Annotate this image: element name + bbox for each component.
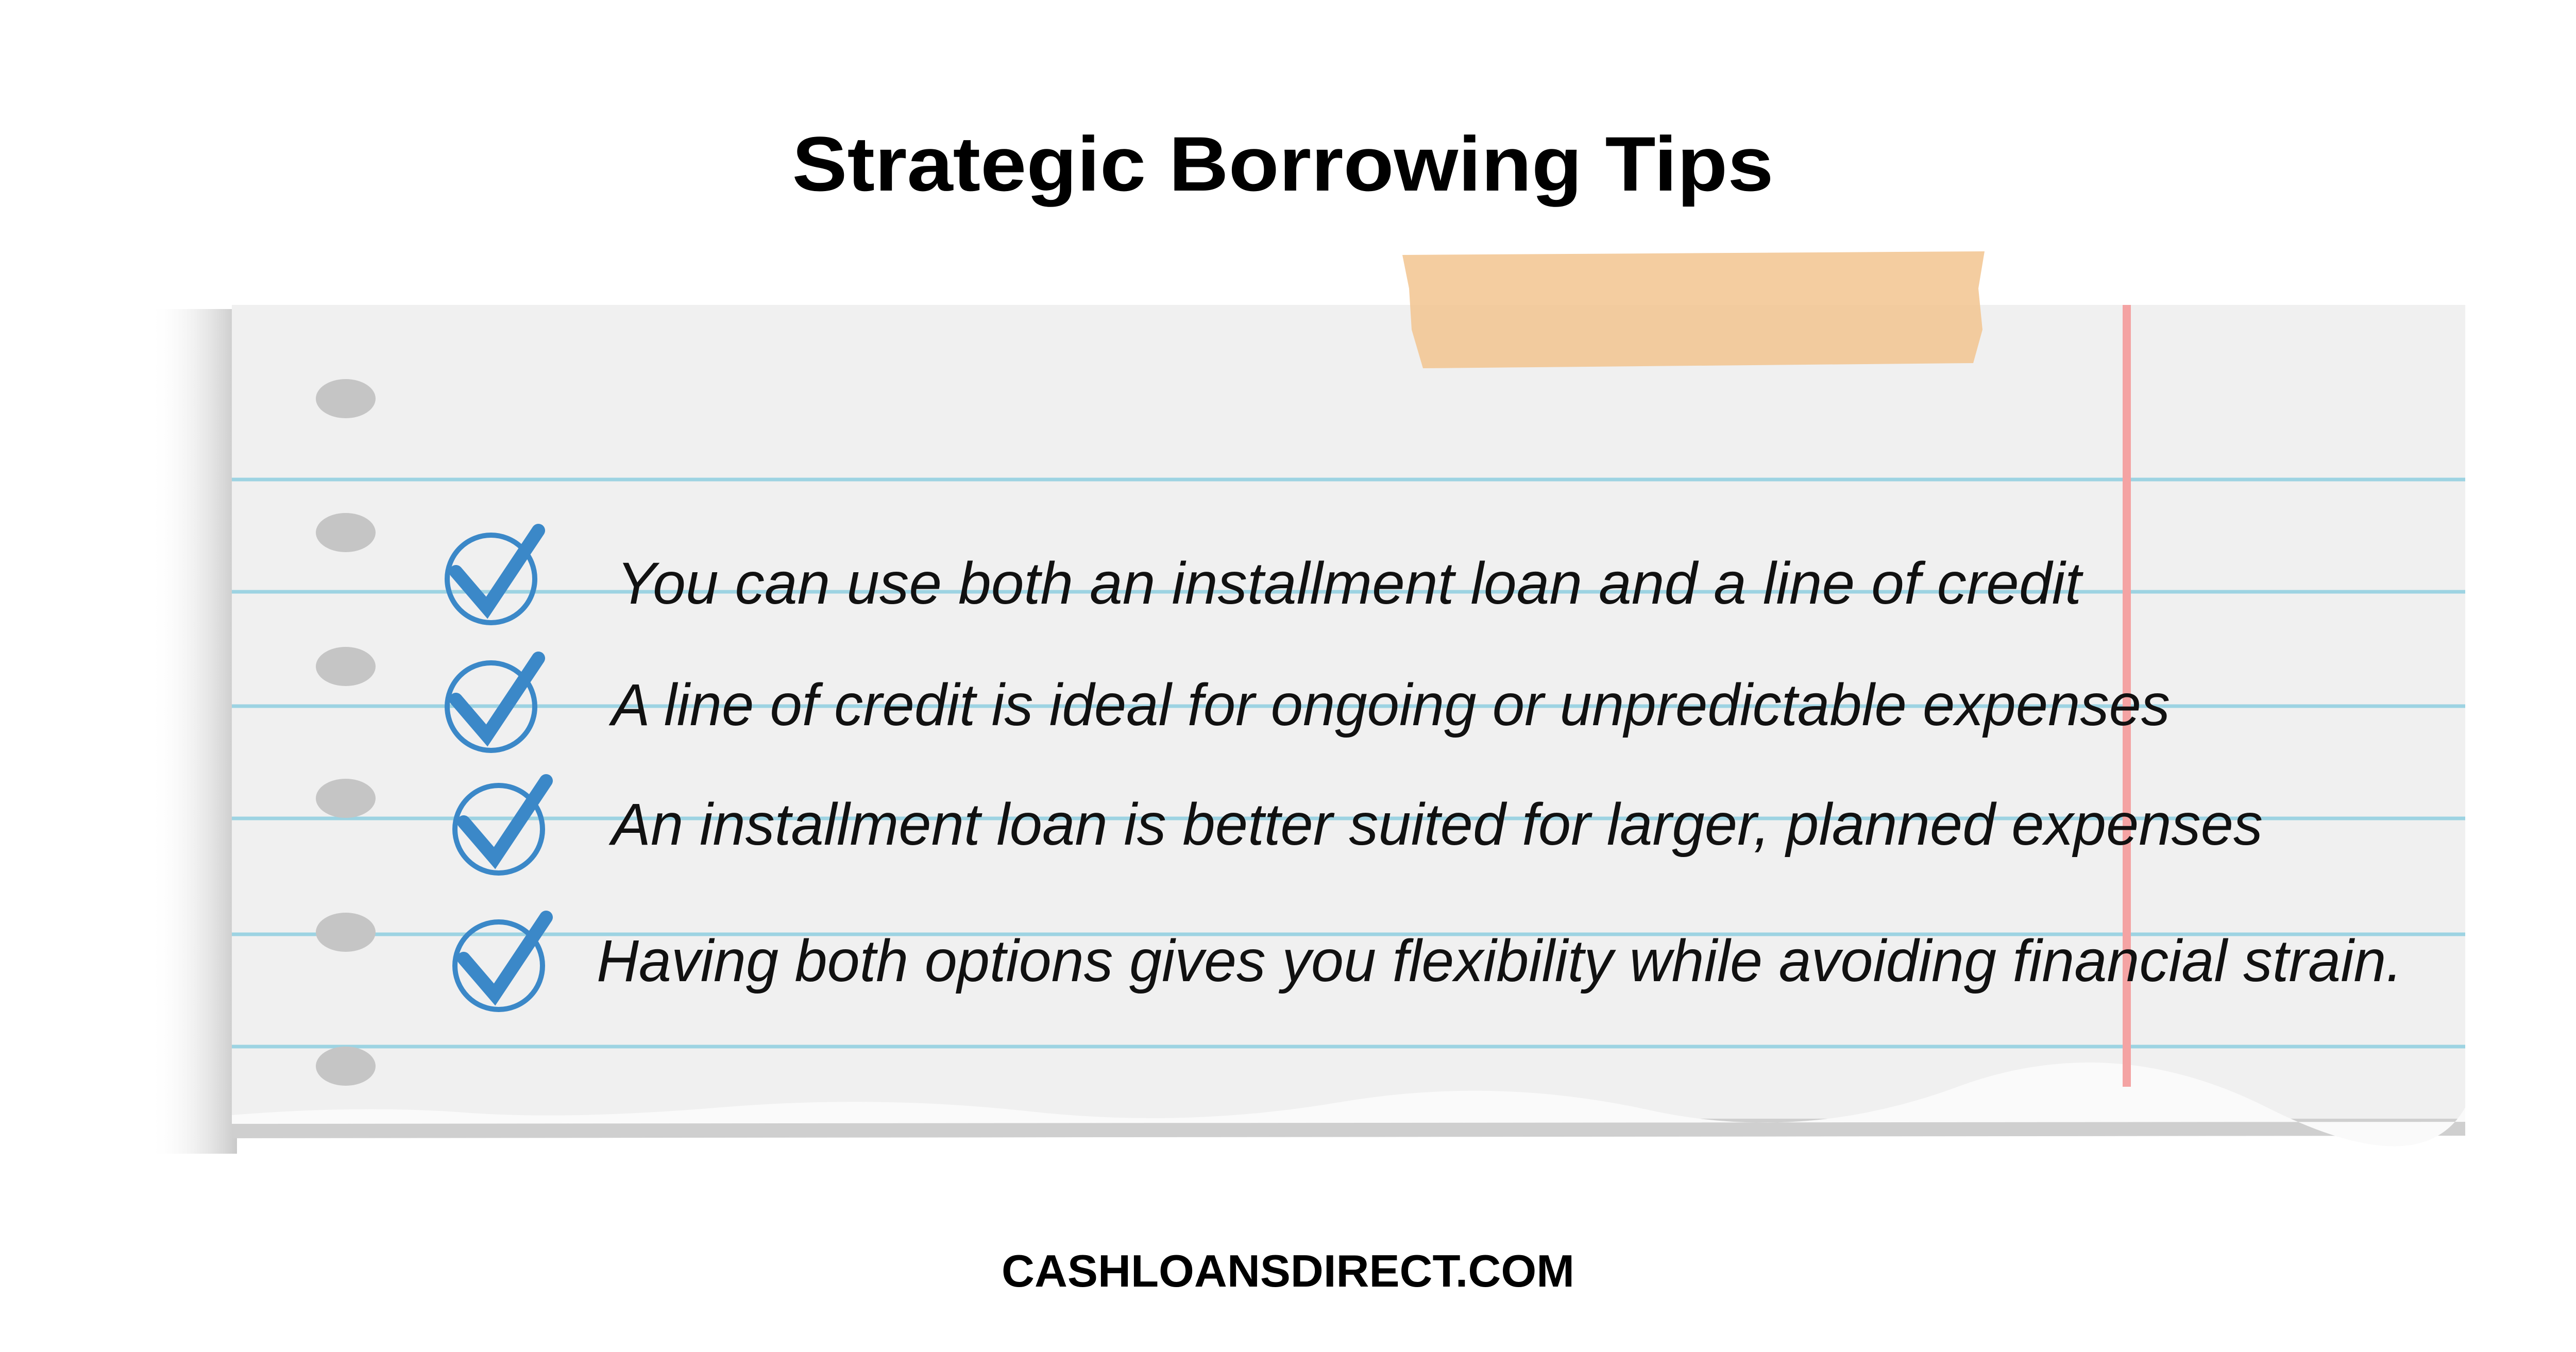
icon: check 2 bbox=[447, 658, 538, 750]
title: Strategic Borrowing Tips bbox=[792, 121, 1773, 207]
tip text 4: Having both options gives you flexibility while avoiding financial strain. bbox=[597, 928, 2402, 994]
icon: check 4 bbox=[455, 917, 546, 1009]
panel: notebook paper bbox=[149, 305, 2465, 1154]
footer: CASHLOANSDIRECT.COM bbox=[1002, 1245, 1574, 1296]
tip text 3: An installment loan is better suited for larger, planned expenses bbox=[608, 792, 2263, 858]
tape bbox=[1402, 251, 1985, 368]
tip text 2: A line of credit is ideal for ongoing or unpredictable expenses bbox=[608, 672, 2170, 738]
icon: check 1 bbox=[447, 530, 538, 623]
tip text 1: You can use both an installment loan and a line of credit bbox=[617, 551, 2083, 617]
icon: check 3 bbox=[455, 781, 546, 873]
